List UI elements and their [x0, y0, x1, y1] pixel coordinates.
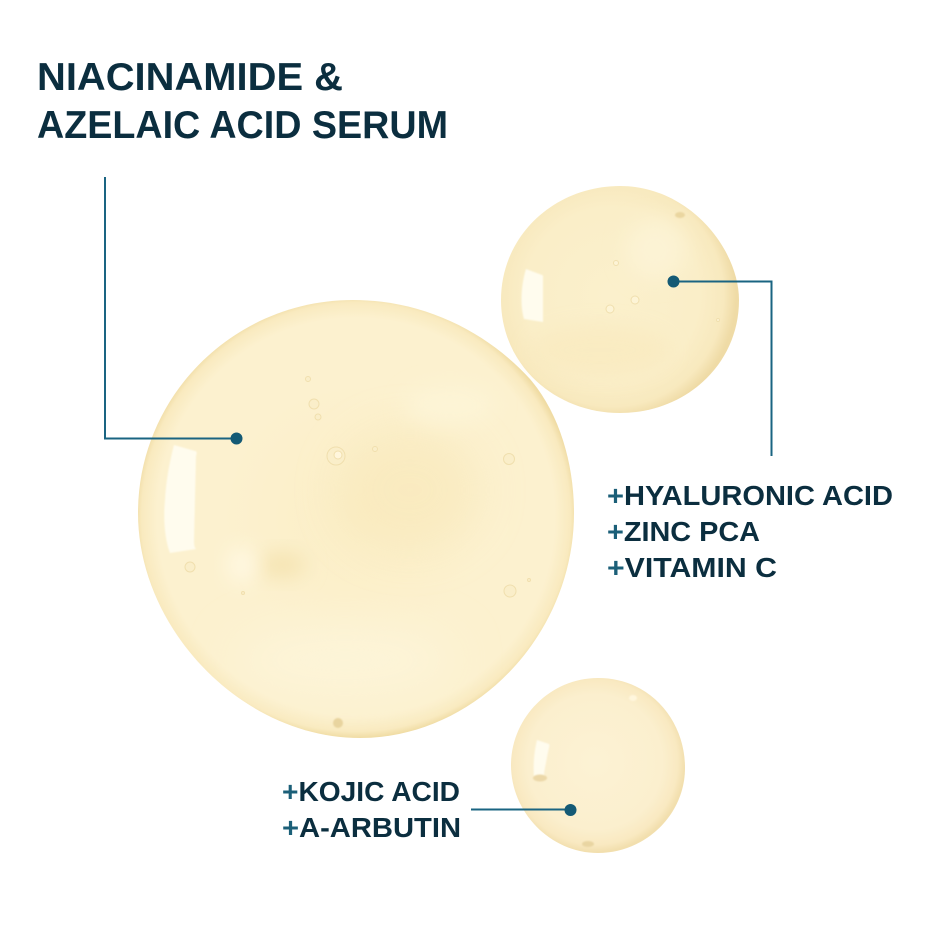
label: lower right drop ingredients: +A-ARBUTIN	[282, 812, 461, 843]
highlight	[534, 740, 549, 779]
highlight	[522, 269, 543, 322]
callout line: upper right drop	[668, 276, 772, 456]
title: NIACINAMIDE &	[37, 56, 343, 99]
callout line: lower right drop	[471, 804, 576, 816]
callout line: main drop	[105, 177, 242, 444]
title	[37, 56, 448, 147]
label: lower right drop ingredients	[282, 776, 461, 843]
lower right serum drop	[511, 678, 685, 853]
title: AZELAIC ACID SERUM	[37, 104, 448, 147]
label: upper right drop ingredients	[607, 480, 893, 583]
label: lower right drop ingredients: +KOJIC ACID	[282, 776, 460, 807]
bubbles	[185, 376, 530, 597]
label: upper right drop ingredients: +ZINC PCA	[607, 516, 760, 547]
highlight	[164, 445, 197, 553]
label: upper right drop ingredients: +HYALURONIC ACID	[607, 480, 893, 511]
label: upper right drop ingredients: +VITAMIN C	[607, 552, 777, 583]
main serum drop	[138, 300, 574, 738]
bubbles	[606, 260, 720, 322]
upper right serum drop	[501, 186, 739, 413]
